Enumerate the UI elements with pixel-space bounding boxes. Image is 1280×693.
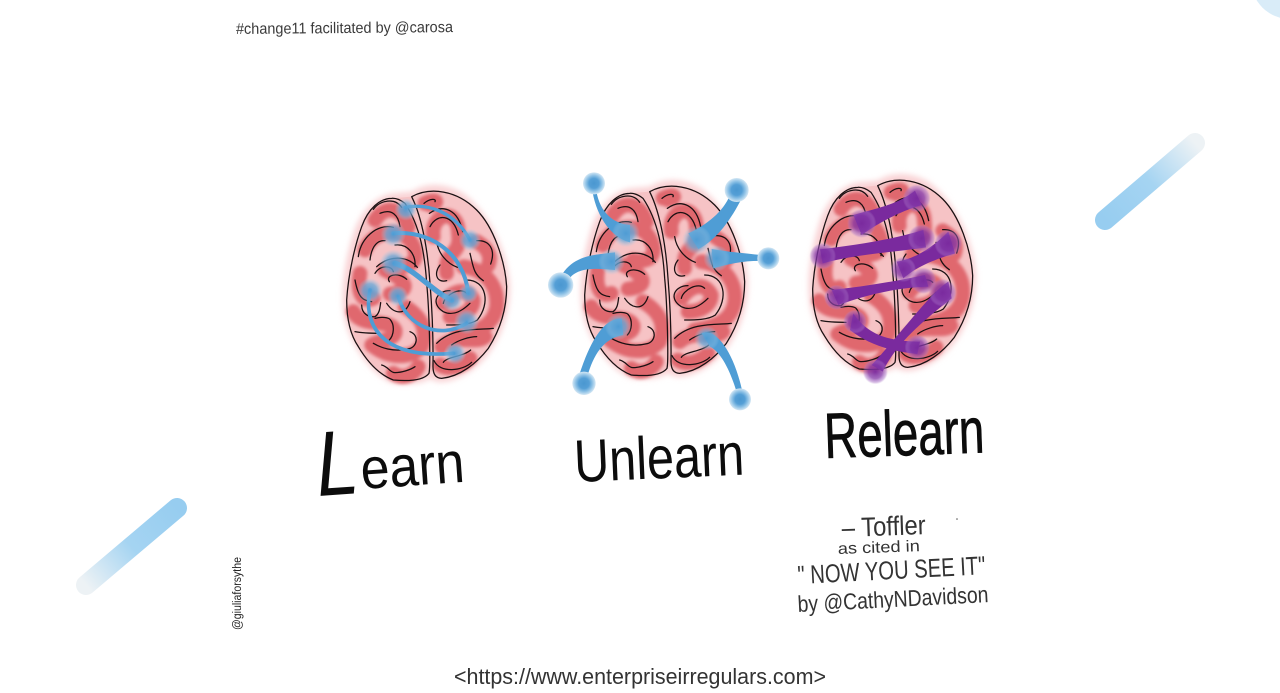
source URL: <https://www.enterpriseirregulars.com> — [454, 664, 826, 689]
attribution: book title: " NOW YOU SEE IT" — [797, 550, 986, 590]
panel: unlearn brain — [548, 172, 779, 410]
decorative bar: upper right — [1105, 143, 1195, 220]
panel: learn brain — [343, 185, 510, 384]
attribution: Toffler: – Toffler — [841, 510, 926, 543]
vertical artist credit: @giuliaforsythe — [232, 557, 244, 630]
attribution block — [797, 510, 989, 617]
title: Learn: earn — [358, 430, 467, 502]
panel: relearn brain — [809, 174, 976, 384]
header credit line: #change11 facilitated by @carosa — [236, 19, 453, 38]
blue looping connections — [357, 198, 481, 365]
title: Learn — [313, 404, 467, 516]
title: Unlearn: Unlearn — [573, 421, 745, 495]
purple cross links — [809, 184, 962, 384]
title: Learn: L — [313, 411, 362, 516]
decorative corner circle — [1251, 0, 1280, 19]
attribution: author: by @CathyNDavidson — [797, 581, 989, 617]
decorative bar: lower left — [86, 508, 177, 585]
title: Relearn: Relearn — [823, 394, 985, 472]
attribution: as cited in: as cited in — [838, 538, 920, 558]
blue tendrils reaching out — [548, 172, 779, 410]
